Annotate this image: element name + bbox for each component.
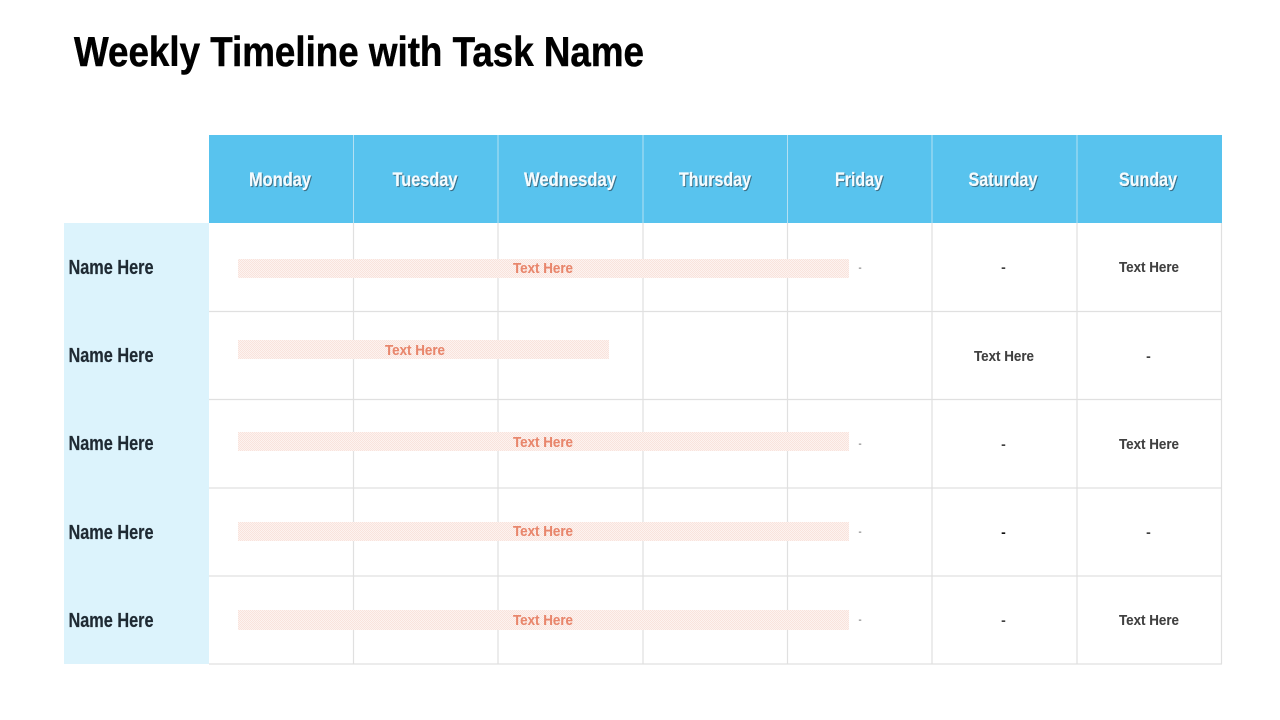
header: Wednesday: Wednesday	[524, 170, 616, 191]
row 5 cell values: -	[858, 615, 862, 626]
row 1 cell values: -	[858, 263, 862, 274]
task bar row 2: Text Here	[385, 342, 445, 359]
header: Tuesday: Tuesday	[392, 170, 458, 191]
row 4 cell values: -	[858, 527, 862, 538]
row label 3: Name Here	[68, 433, 154, 455]
row label 4: Name Here	[68, 522, 154, 544]
task bar row 3: Text Here	[513, 434, 573, 451]
task bar row 2	[238, 340, 609, 359]
row 1 cell values: -	[1001, 259, 1006, 275]
title: Weekly Timeline with Task Name	[74, 28, 644, 75]
task bar row 1	[238, 259, 849, 278]
header: Monday: Monday	[250, 171, 312, 192]
header: Sunday: Sunday	[1119, 170, 1177, 191]
row 2 cell values: Text Here	[974, 348, 1034, 365]
header: Friday: Friday	[835, 170, 883, 191]
header: Thursday: Thursday	[679, 170, 751, 191]
header: Saturday: Saturday	[968, 170, 1038, 191]
header: Sunday: Sunday	[1120, 171, 1178, 192]
row 4 cell values: -	[1146, 524, 1151, 540]
header: Friday: Friday	[836, 171, 884, 192]
row 4 cell values	[858, 524, 1151, 540]
task bar row 5	[238, 610, 849, 630]
task bar row 1: Text Here	[513, 260, 573, 277]
task bar row 4: Text Here	[513, 523, 573, 540]
row 2 cell values: -	[1146, 348, 1151, 364]
row 1 cell values: Text Here	[1119, 259, 1179, 276]
header: Saturday: Saturday	[970, 171, 1039, 192]
row label 1: Name Here	[68, 257, 154, 279]
row 3 cell values: -	[1001, 436, 1006, 452]
task bar row 3	[238, 432, 849, 451]
row 4 cell values: -	[1001, 524, 1006, 540]
panel: name column	[64, 223, 209, 664]
row 5 cell values	[858, 612, 1179, 629]
header: Monday: Monday	[249, 170, 311, 191]
panel: header row	[209, 135, 1222, 223]
row 5 cell values: -	[1001, 612, 1006, 628]
row 2 cell values	[974, 348, 1151, 365]
header: Thursday: Thursday	[680, 171, 752, 192]
row label 2: Name Here	[68, 345, 154, 367]
task bar row 5: Text Here	[513, 612, 573, 629]
row 5 cell values: Text Here	[1119, 612, 1179, 629]
row 3 cell values: -	[858, 439, 862, 450]
row 3 cell values: Text Here	[1119, 436, 1179, 453]
row label 5: Name Here	[68, 610, 154, 632]
panel: table body	[209, 223, 1222, 664]
row 1 cell values	[858, 259, 1179, 276]
task bar row 4	[238, 522, 849, 541]
header: Tuesday: Tuesday	[394, 171, 459, 192]
row 3 cell values	[858, 436, 1179, 453]
table	[64, 135, 1222, 664]
header: Wednesday: Wednesday	[525, 171, 617, 192]
